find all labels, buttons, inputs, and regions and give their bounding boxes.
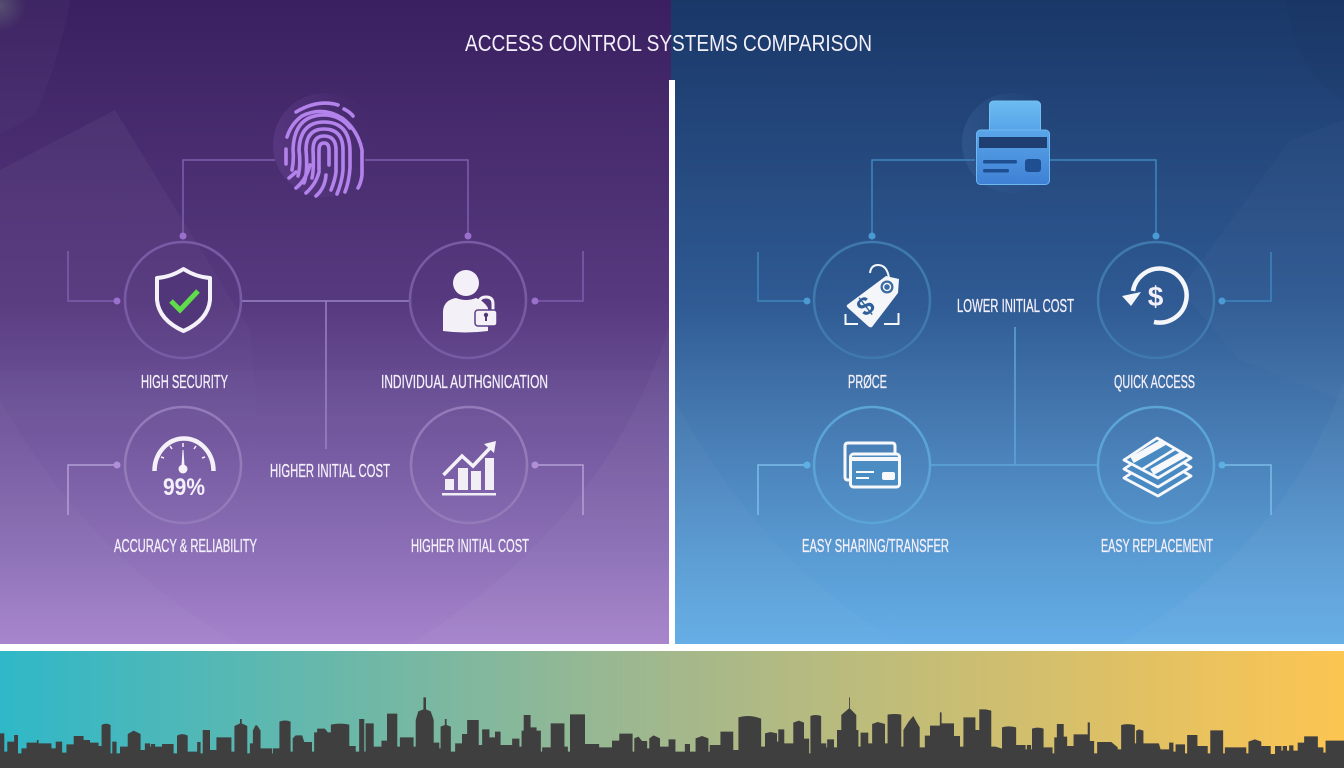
icon: access card bbox=[962, 93, 1062, 193]
footer band: city skyline bbox=[0, 644, 1344, 768]
connector lines: biometric bbox=[68, 160, 583, 515]
icon: price tag: $ bbox=[851, 289, 881, 322]
icon: refund arrow with dollar: $ bbox=[1148, 281, 1164, 312]
icon: stack of cards bbox=[1098, 407, 1214, 523]
icon: gauge 99%: 99% bbox=[163, 474, 205, 501]
icon: two cards bbox=[814, 407, 930, 523]
icon: fingerprint bbox=[273, 93, 377, 197]
panel: card access bbox=[671, 0, 1344, 644]
label: price: PRØCE bbox=[848, 372, 887, 392]
title: ACCESS CONTROL SYSTEMS COMPARISON bbox=[465, 30, 872, 56]
label: higher initial cost center: HIGHER INITIAL COST bbox=[270, 461, 390, 481]
icon: person with padlock bbox=[410, 242, 526, 358]
label: high security: HIGH SECURITY bbox=[141, 372, 228, 392]
label: easy replacement: EASY REPLACEMENT bbox=[1101, 536, 1213, 556]
panel: biometric access bbox=[0, 0, 671, 644]
icon: rising bar chart bbox=[411, 407, 527, 523]
connector lines: card bbox=[758, 160, 1271, 515]
skyline left half bbox=[0, 697, 672, 768]
icon: shield with check bbox=[125, 242, 241, 358]
vertical divider bbox=[669, 80, 675, 645]
label: easy sharing transfer: EASY SHARING/TRANSFER bbox=[802, 536, 949, 556]
label: individual authentication: INDIVIDUAL AUTHGNICATION bbox=[381, 372, 548, 392]
label: higher initial cost: HIGHER INITIAL COST bbox=[411, 536, 529, 556]
label: quick access: QUICK ACCESS bbox=[1114, 372, 1195, 392]
icon: refund arrow with dollar bbox=[1098, 242, 1214, 358]
label: lower initial cost center: LOWER INITIAL COST bbox=[957, 296, 1074, 316]
label: accuracy and reliability: ACCURACY & RELIABILITY bbox=[114, 536, 257, 556]
skyline right half bbox=[672, 697, 1344, 768]
icon: gauge 99% bbox=[125, 407, 241, 523]
icon: price tag bbox=[814, 242, 930, 358]
